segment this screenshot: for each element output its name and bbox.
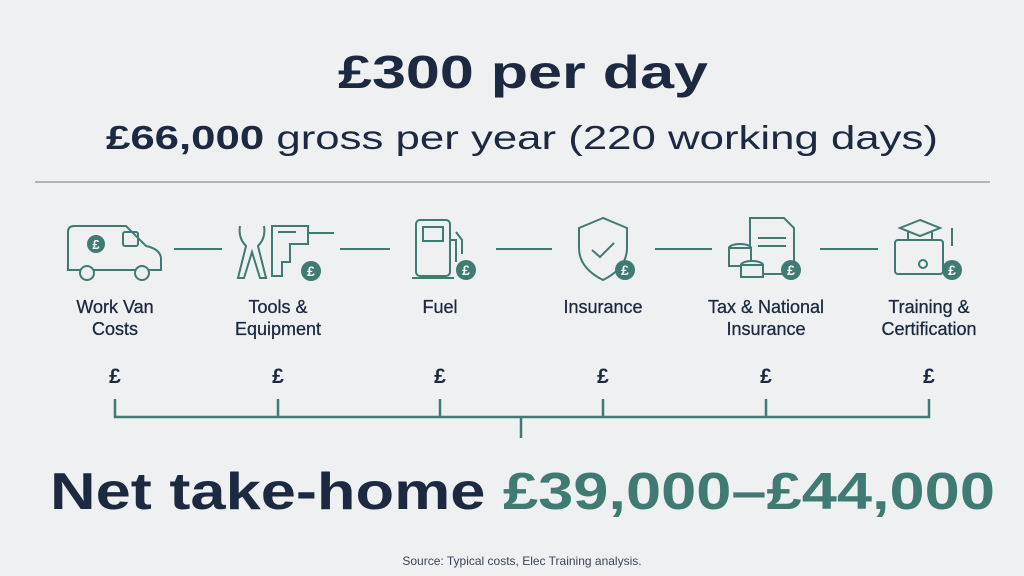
icon: shield xyxy=(579,218,635,280)
subtitle: £66,000 gross per year (220 working days) xyxy=(106,119,938,156)
icon: van: £ xyxy=(92,237,100,252)
pound markers: £ xyxy=(597,365,609,388)
icon: fuel xyxy=(412,220,476,280)
labels: Tax & National xyxy=(708,297,824,317)
labels: Equipment xyxy=(235,319,321,339)
icon: fuel: £ xyxy=(462,262,470,278)
source: Source: Typical costs, Elec Training analysis. xyxy=(402,554,642,568)
bracket xyxy=(115,399,929,438)
icon: shield: £ xyxy=(621,262,629,278)
connectors xyxy=(174,248,878,250)
icon: graduation xyxy=(895,220,962,280)
pound markers: £ xyxy=(760,365,772,388)
labels: Tools & xyxy=(248,297,308,317)
labels: Work Van xyxy=(76,297,154,317)
icon: graduation: £ xyxy=(948,262,956,278)
labels xyxy=(76,297,977,339)
labels: Fuel xyxy=(422,297,458,317)
icon: tools xyxy=(238,226,334,281)
icon: tools: £ xyxy=(307,263,315,279)
labels: Insurance xyxy=(563,297,643,317)
labels: Training & xyxy=(888,297,970,317)
pound markers: £ xyxy=(109,365,121,388)
labels: Costs xyxy=(92,319,138,339)
icon: van xyxy=(68,226,161,280)
icon: tax: £ xyxy=(787,262,795,278)
labels: Insurance xyxy=(726,319,806,339)
pound markers xyxy=(109,365,935,388)
labels: Certification xyxy=(881,319,977,339)
pound markers: £ xyxy=(272,365,284,388)
pound markers: £ xyxy=(434,365,446,388)
icon: tax xyxy=(729,218,801,280)
net take-home: Net take-home £39,000–£44,000 xyxy=(50,463,995,521)
pound markers: £ xyxy=(923,365,935,388)
title: £300 per day xyxy=(338,46,709,98)
